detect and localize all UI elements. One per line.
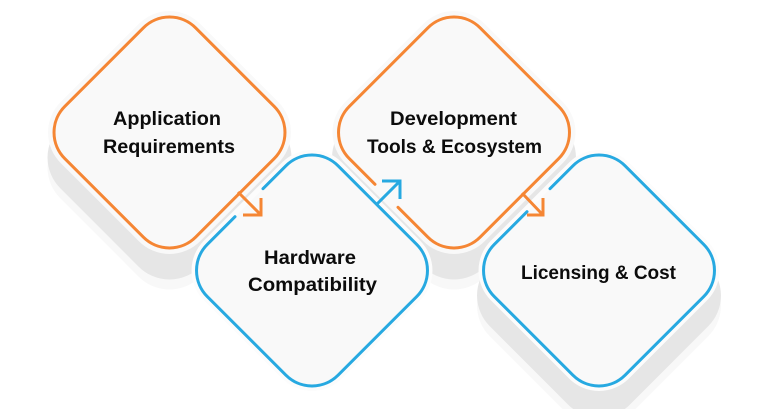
panel: hardware compatibility <box>197 155 427 386</box>
arrow: requirements to hardware <box>238 192 261 215</box>
label: hardware compatibility: Compatibility <box>248 275 377 296</box>
panel: development tools and ecosystem <box>339 17 569 283</box>
label: application requirements <box>103 109 235 158</box>
label: licensing and cost: Licensing & Cost <box>521 263 677 284</box>
panel: application requirements <box>54 17 285 283</box>
label: development tools and ecosystem: Tools & Ecosystem <box>367 137 542 158</box>
label: application requirements: Requirements <box>103 137 235 158</box>
panel: licensing and cost <box>484 155 714 409</box>
arrow: hardware to development tools <box>377 181 400 204</box>
label: development tools and ecosystem <box>367 109 542 158</box>
arrow: development tools to licensing <box>522 193 543 215</box>
label: application requirements: Application <box>113 109 221 130</box>
label: hardware compatibility: Hardware <box>264 248 356 269</box>
label: development tools and ecosystem: Development <box>390 109 518 130</box>
label: hardware compatibility <box>248 248 377 296</box>
